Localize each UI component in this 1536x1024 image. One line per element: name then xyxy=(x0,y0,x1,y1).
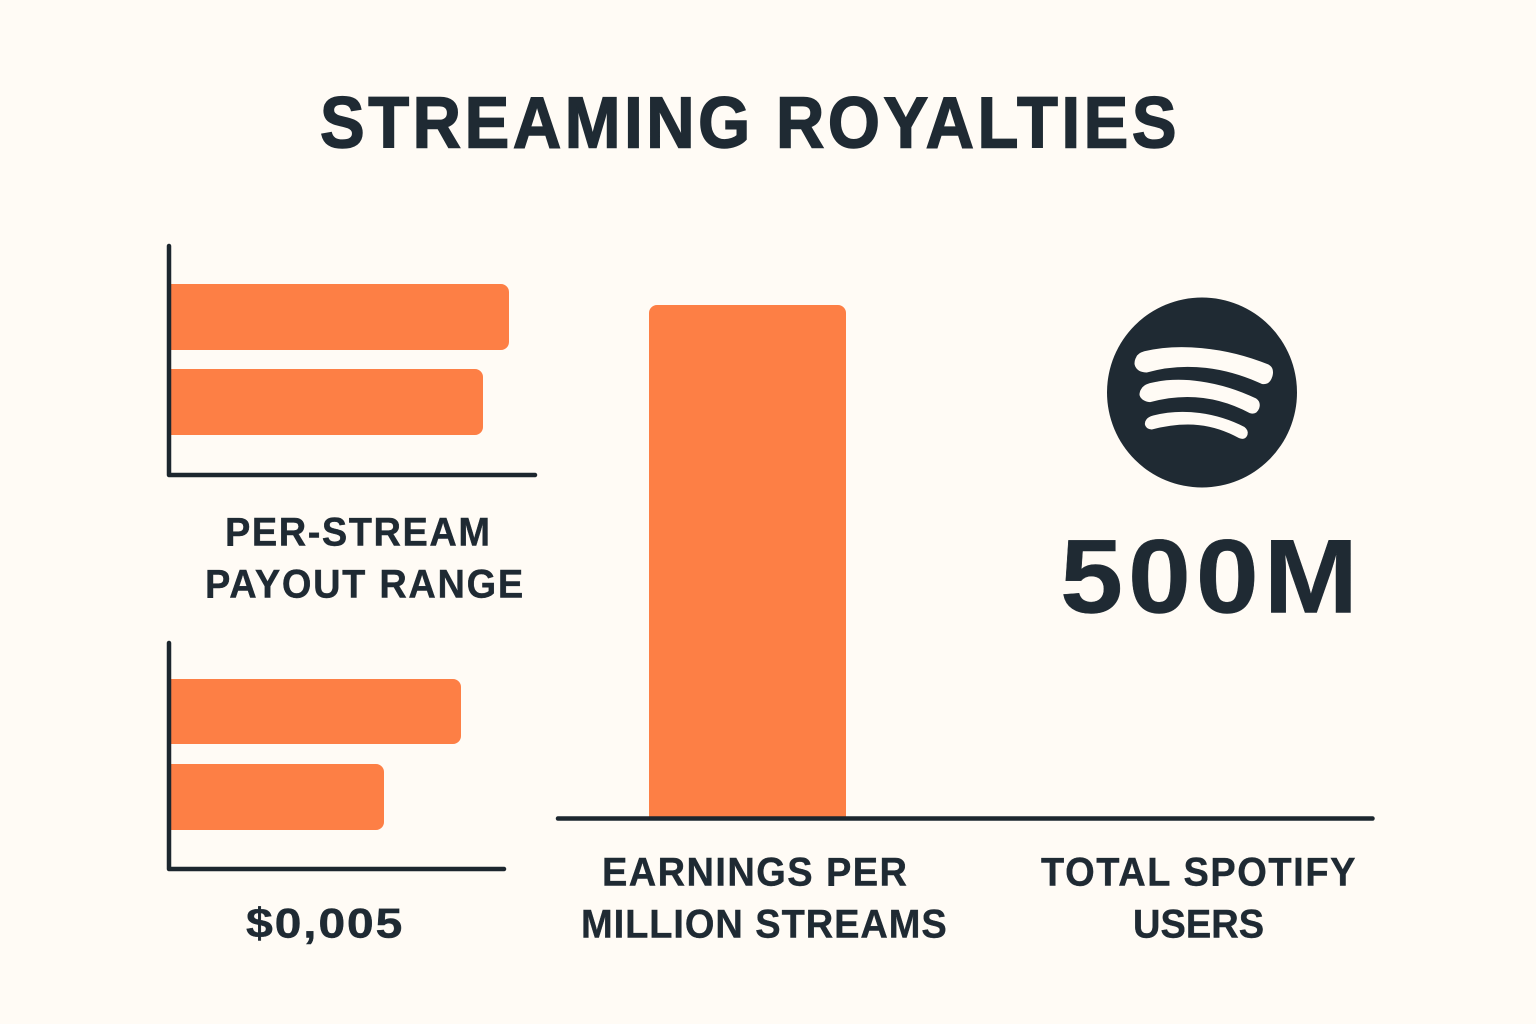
bar: upper payout xyxy=(171,284,509,350)
panel: $0,005 chart xyxy=(169,643,504,869)
stat: 500M: 500M xyxy=(1060,518,1358,636)
label: $0,005: $0,005 xyxy=(246,899,402,947)
chart axes xyxy=(169,643,504,869)
label: earnings per million streams xyxy=(581,851,947,947)
label: total spotify users: USERS xyxy=(1133,903,1264,947)
bar: upper value xyxy=(171,679,461,744)
label: total spotify users xyxy=(1041,851,1355,947)
panel: per-stream payout range chart xyxy=(169,246,535,475)
chart axes xyxy=(169,246,535,475)
label: per-stream payout range: PAYOUT RANGE xyxy=(205,563,523,607)
icon: spotify logo xyxy=(1107,298,1297,488)
label: total spotify users: TOTAL SPOTIFY xyxy=(1041,851,1355,895)
baseline axis xyxy=(558,816,1372,821)
label: per-stream payout range xyxy=(205,511,523,607)
label: earnings per million streams: EARNINGS PER xyxy=(602,851,907,895)
label: per-stream payout range: PER-STREAM xyxy=(225,511,490,555)
bar: lower payout xyxy=(171,369,483,435)
bar: lower value xyxy=(171,764,384,830)
title: STREAMING ROYALTIES xyxy=(320,82,1177,163)
bar: earnings per million streams xyxy=(649,305,846,818)
label: earnings per million streams: MILLION STREAMS xyxy=(581,903,947,947)
